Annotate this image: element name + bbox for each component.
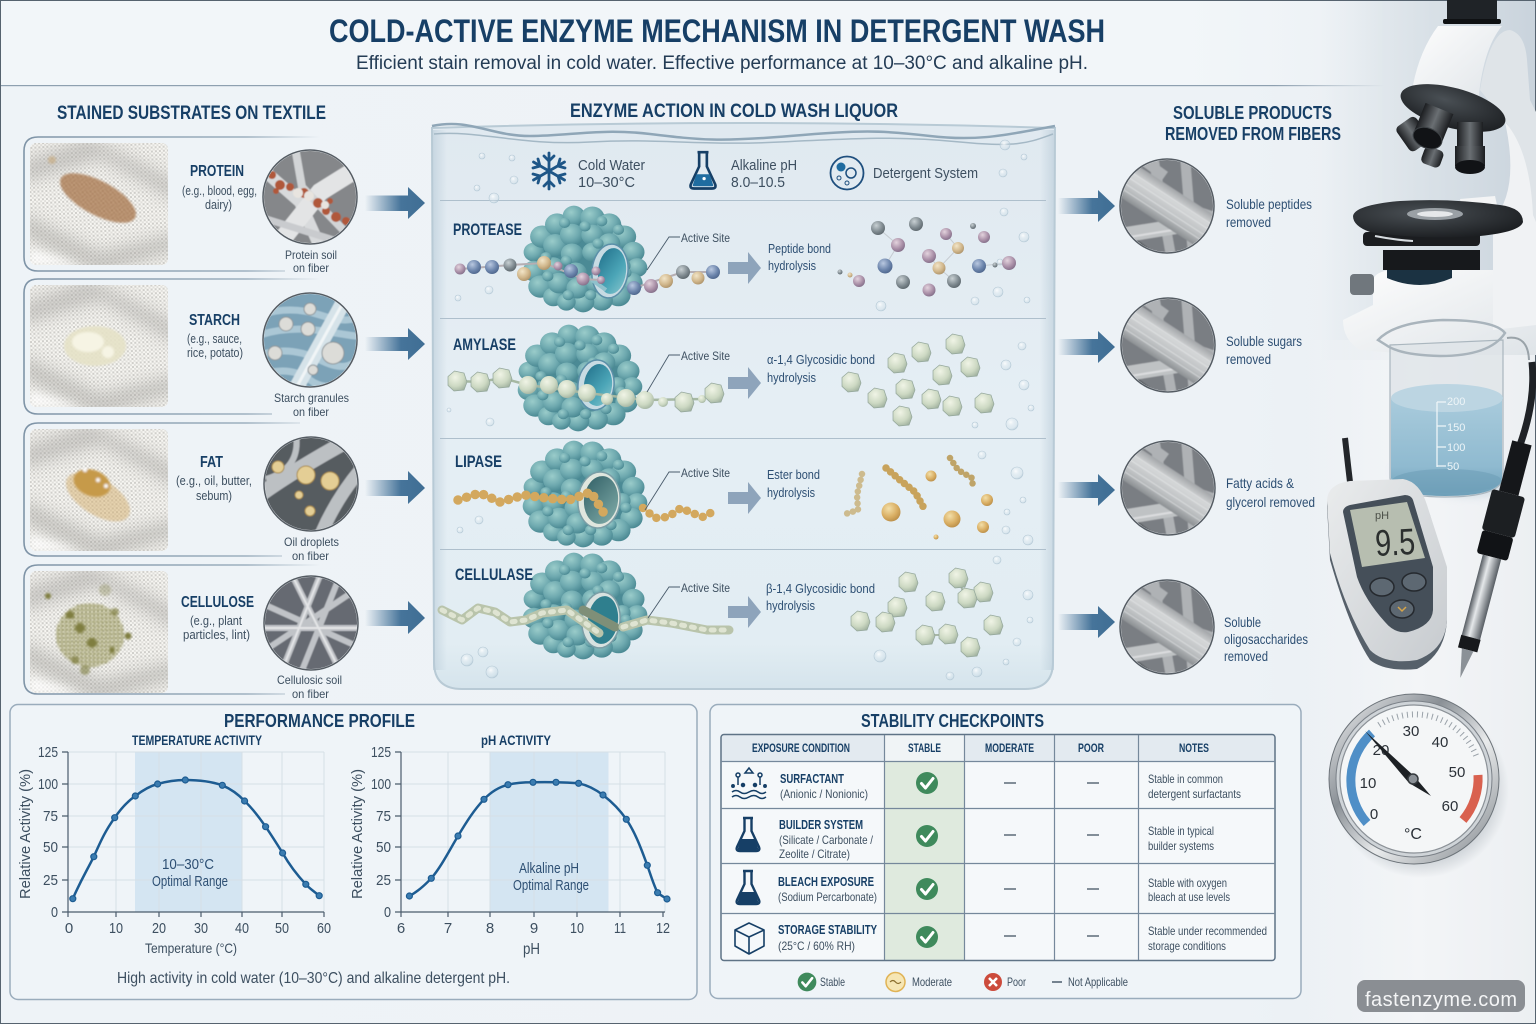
row: surfactant: detergent surfactants [1148, 787, 1241, 801]
row: cellulase [442, 553, 1003, 659]
table: stability: POOR [1078, 743, 1105, 755]
enzyme: lipase [523, 441, 647, 547]
row: builder system [737, 818, 1214, 861]
panel: cellulose substrate: on fiber [292, 687, 329, 701]
row: amylase: AMYLASE [453, 335, 516, 354]
bubbles [447, 140, 1034, 680]
chart: temperature activity: 50 [275, 920, 289, 937]
icon: flask [737, 818, 759, 851]
panel: performance profile: PERFORMANCE PROFILE [224, 711, 415, 731]
condition: cold water: Cold Water [578, 157, 645, 174]
arrow: starch to beaker [365, 328, 425, 360]
arrow: cellulase products [1058, 606, 1115, 638]
chart: pH activity: 125 [371, 744, 391, 761]
callout: active site: Active Site [681, 231, 730, 245]
panel: stability checkpoints [710, 704, 1301, 998]
condition: cold water [533, 153, 645, 191]
head [1413, 26, 1502, 105]
result: soluble oligosaccharides [1098, 574, 1308, 680]
chart: temperature activity: TEMPERATURE ACTIVITY [132, 733, 262, 748]
panel: fat substrate [20, 423, 361, 563]
icon: detergent bubbles [830, 156, 864, 190]
pH meter: pH [1375, 510, 1389, 522]
icon: protein soil on fiber [260, 147, 360, 247]
panel: protein substrate: (e.g., blood, egg, [182, 184, 257, 198]
chart: temperature activity: 125 [38, 744, 58, 761]
chart: pH activity: 0 [384, 904, 391, 921]
panel: cellulose substrate: CELLULOSE [181, 594, 254, 611]
panel: wash liquor beaker [432, 123, 1055, 689]
label: alpha glycosidic bond: hydrolysis [767, 370, 816, 385]
panel: protein substrate: dairy) [205, 198, 232, 212]
label: ester bond [767, 467, 820, 500]
products: oligosaccharides [851, 568, 1003, 657]
arrow: protein to beaker [365, 187, 425, 219]
condition: detergent system [830, 156, 978, 190]
callout: active site: Active Site [681, 349, 730, 363]
chart: pH activity: Relative Activity (%) [350, 769, 366, 899]
substrate chain: protein [454, 256, 720, 295]
row: builder system: (Silicate / Carbonate / [779, 833, 874, 847]
condition: cold water: 10–30°C [578, 174, 635, 191]
result: soluble sugars: removed [1226, 351, 1271, 367]
result: soluble peptides: Soluble peptides [1226, 196, 1312, 212]
glass beaker: 150 [1447, 422, 1465, 434]
chart: temperature activity: 75 [43, 808, 58, 825]
chart: temperature activity: 30 [194, 920, 208, 937]
subtitle: Efficient stain removal in cold water. Effective performance at 10–30°C and alkaline pH. [356, 53, 1088, 74]
legend [798, 972, 1128, 992]
icon: surfactant [732, 768, 766, 798]
chart: pH activity: 9 [530, 920, 538, 937]
arrow: hydrolysis [728, 596, 761, 628]
substrate chain: cellulose [442, 608, 729, 633]
nosepiece [1396, 75, 1510, 141]
condition: alkaline pH [690, 152, 797, 191]
row: builder system: builder systems [1148, 839, 1214, 853]
panel: cellulose substrate: (e.g., plant [190, 614, 242, 628]
label: ester bond: hydrolysis [767, 485, 815, 500]
row: storage stability: storage conditions [1148, 939, 1226, 953]
row: storage stability: Stable under recommended [1148, 924, 1267, 938]
arrow: lipase products [1058, 474, 1115, 506]
row: builder system: BUILDER SYSTEM [779, 818, 863, 832]
label: beta glycosidic bond: hydrolysis [766, 598, 815, 613]
row: cellulase: CELLULASE [455, 565, 533, 584]
watermark: fastenzyme.com [1365, 989, 1517, 1011]
table: stability: STABLE [908, 743, 941, 755]
enzyme: cellulase [523, 553, 647, 659]
row: storage stability: (25°C / 60% RH) [778, 939, 855, 953]
row: lipase [455, 441, 993, 547]
probe [1444, 338, 1536, 682]
thermometer dial: 10 [1360, 775, 1376, 792]
chart: pH activity: 75 [376, 808, 391, 825]
legend: Moderate [912, 975, 952, 989]
chart: pH activity: 6 [397, 920, 405, 937]
chart: pH activity: 11 [614, 920, 626, 937]
pH meter: 9.5 [1374, 521, 1416, 564]
icon: snowflake [533, 153, 565, 189]
chart: pH activity: 12 [656, 920, 670, 937]
objectives [1394, 103, 1485, 174]
heading: soluble products: REMOVED FROM FIBERS [1165, 124, 1341, 144]
label: alpha glycosidic bond [767, 352, 875, 385]
chart: temperature activity: 100 [38, 776, 58, 793]
row: surfactant: (Anionic / Nonionic) [780, 787, 868, 801]
title: COLD-ACTIVE ENZYME MECHANISM IN DETERGENT WASH [329, 13, 1105, 49]
row: protease [453, 206, 1016, 312]
panel: fat substrate: Oil droplets [284, 535, 339, 549]
label: alpha glycosidic bond: α-1,4 Glycosidic bond [767, 352, 875, 367]
chart: temperature activity: 40 [235, 920, 249, 937]
pH meter [1327, 438, 1447, 670]
result: soluble peptides: removed [1226, 214, 1271, 230]
glass beaker: 50 [1447, 461, 1459, 473]
substrate chain: fat [458, 492, 716, 518]
chart: temperature activity [18, 733, 331, 956]
row: protease: PROTEASE [453, 220, 522, 239]
label: beta glycosidic bond [766, 581, 875, 613]
glass beaker: 200 [1447, 396, 1465, 408]
row: builder system: Zeolite / Citrate) [779, 847, 850, 861]
panel: starch substrate: on fiber [293, 405, 329, 419]
condition: alkaline pH: Alkaline pH [731, 157, 797, 174]
icon: flask [690, 152, 716, 188]
arrow: fat to beaker [365, 471, 425, 504]
products: peptides [838, 217, 1016, 296]
panel: stability checkpoints: STABILITY CHECKPOINTS [861, 711, 1044, 731]
result: fatty acids and glycerol: Fatty acids & [1226, 475, 1295, 491]
panel: fat substrate: (e.g., oil, butter, [176, 474, 252, 488]
icon: oil droplets on fiber [261, 434, 361, 534]
result: soluble sugars [1099, 292, 1302, 398]
panel: protein substrate: PROTEIN [190, 163, 244, 180]
arrow: hydrolysis [728, 482, 761, 514]
chart: pH activity: 10 [570, 920, 584, 937]
chart: pH activity: 8 [486, 920, 494, 937]
eyepiece [1447, 0, 1497, 20]
row: bleach exposure [737, 871, 1230, 904]
chart: pH activity: pH [523, 941, 540, 958]
callout: active site [648, 581, 730, 618]
products: sugars [842, 334, 994, 426]
arrow: hydrolysis [728, 367, 761, 399]
heading: soluble products: SOLUBLE PRODUCTS [1173, 103, 1332, 123]
panel: fat substrate: on fiber [292, 549, 329, 563]
panel: cellulose substrate: particles, lint) [183, 628, 250, 642]
glass beaker [1378, 320, 1520, 497]
heading: soluble products [1165, 103, 1341, 144]
condition: detergent system: Detergent System [873, 165, 978, 182]
microscope arm [1480, 30, 1536, 265]
thermometer dial: 40 [1432, 734, 1448, 751]
chart: temperature activity: 25 [43, 872, 58, 889]
watermark [1357, 980, 1525, 1012]
condition: alkaline pH: 8.0–10.5 [731, 174, 785, 191]
callout: active site [647, 231, 730, 270]
row: surfactant: Stable in common [1148, 772, 1223, 786]
row: amylase [448, 325, 994, 431]
enzyme: protease [523, 206, 647, 312]
table: stability [721, 734, 1275, 960]
row: builder system: Stable in typical [1148, 824, 1214, 838]
base [1343, 270, 1536, 355]
glass beaker: 100 [1447, 442, 1465, 454]
table: stability: EXPOSURE CONDITION [752, 743, 850, 755]
legend: Stable [820, 975, 845, 989]
caption: High activity in cold water (10–30°C) and alkaline detergent pH. [117, 970, 510, 987]
chart: temperature activity: 0 [51, 904, 58, 921]
label: peptide bond [768, 241, 831, 273]
chart: temperature activity: Temperature (°C) [145, 940, 237, 956]
table: stability: MODERATE [985, 743, 1034, 755]
legend: Not Applicable [1068, 975, 1128, 989]
row: bleach exposure: (Sodium Percarbonate) [778, 890, 877, 904]
products: fatty acids and glycerol [842, 458, 993, 540]
chart: temperature activity: 20 [152, 920, 166, 937]
thermometer dial: 30 [1403, 723, 1419, 740]
icon: cellulosic soil on fiber [261, 573, 361, 673]
chart: pH activity: 50 [376, 839, 391, 856]
microscope [1343, 0, 1536, 355]
row: bleach exposure: Stable with oxygen [1148, 876, 1227, 890]
chart: pH activity [350, 733, 670, 958]
heading: enzyme action: ENZYME ACTION IN COLD WASH LIQUOR [570, 101, 898, 122]
callout: active site: Active Site [681, 581, 730, 595]
chart: temperature activity: Optimal Range [152, 874, 228, 890]
chart: pH activity: 100 [371, 776, 391, 793]
result: soluble oligosaccharides: oligosaccharides [1224, 631, 1308, 647]
chart: temperature activity: 0 [65, 920, 73, 937]
thermometer dial: 20 [1373, 742, 1389, 759]
callout: active site [645, 466, 730, 510]
heading: stained substrates: STAINED SUBSTRATES ON TEXTILE [57, 103, 326, 124]
panel: protein substrate: on fiber [293, 261, 329, 275]
label: peptide bond: Peptide bond [768, 241, 831, 256]
panel: starch substrate: rice, potato) [187, 346, 243, 360]
thermometer dial [1329, 694, 1509, 878]
icon: box [735, 923, 764, 954]
substrate chain: starch [448, 368, 724, 412]
chart: temperature activity: Relative Activity (%) [18, 769, 34, 899]
result: soluble oligosaccharides: removed [1224, 648, 1268, 664]
row: bleach exposure: BLEACH EXPOSURE [778, 875, 874, 889]
thermometer dial: 50 [1449, 764, 1465, 781]
chart: temperature activity: 10 [109, 920, 123, 937]
arrow: protease products [1058, 190, 1115, 222]
arrow: amylase products [1058, 331, 1115, 363]
stage [1353, 200, 1523, 237]
label: peptide bond: hydrolysis [768, 258, 816, 273]
result: fatty acids and glycerol [1099, 435, 1315, 541]
panel: starch substrate: STARCH [189, 312, 240, 329]
panel: cellulose substrate [20, 565, 361, 701]
panel: performance profile [10, 704, 697, 1000]
callout: active site [647, 349, 730, 392]
panel: starch substrate [20, 279, 362, 419]
row: surfactant [732, 768, 1241, 801]
result: fatty acids and glycerol: glycerol removed [1226, 494, 1315, 510]
thermometer dial: 0 [1370, 806, 1378, 823]
thermometer dial: °C [1404, 826, 1422, 843]
result: soluble oligosaccharides: Soluble [1224, 614, 1261, 630]
result: soluble sugars: Soluble sugars [1226, 333, 1302, 349]
enzyme: amylase [518, 325, 642, 431]
label: beta glycosidic bond: β-1,4 Glycosidic bond [766, 581, 875, 596]
label: ester bond: Ester bond [767, 467, 820, 482]
panel: fat substrate: sebum) [196, 489, 232, 503]
callout: active site: Active Site [681, 466, 730, 480]
icon: flask [737, 871, 759, 904]
chart: pH activity: pH ACTIVITY [481, 733, 551, 748]
arrow: cellulose to beaker [365, 601, 425, 634]
arrow: hydrolysis [728, 252, 761, 284]
row: storage stability [735, 923, 1267, 954]
chart: temperature activity: 60 [317, 920, 331, 937]
panel: protein substrate: Protein soil [285, 248, 337, 262]
row: surfactant: SURFACTANT [780, 772, 844, 786]
thermometer dial: 60 [1442, 798, 1458, 815]
panel: cellulose substrate: Cellulosic soil [277, 673, 342, 687]
table: stability: NOTES [1179, 743, 1209, 755]
legend: Poor [1007, 975, 1026, 989]
row: lipase: LIPASE [455, 452, 502, 471]
panel: fat substrate: FAT [200, 454, 223, 471]
chart: temperature activity: 10–30°C [162, 857, 214, 873]
chart: temperature activity: 50 [43, 839, 58, 856]
result: soluble peptides [1098, 153, 1312, 259]
panel: starch substrate: (e.g., sauce, [187, 332, 242, 346]
row: bleach exposure: bleach at use levels [1148, 890, 1230, 904]
panel: starch substrate: Starch granules [274, 391, 349, 405]
chart: pH activity: Optimal Range [513, 878, 589, 894]
chart: pH activity: 7 [444, 920, 452, 937]
panel: protein substrate [20, 137, 360, 275]
row: storage stability: STORAGE STABILITY [778, 923, 878, 937]
chart: pH activity: 25 [376, 872, 391, 889]
icon: starch granules on fiber [260, 290, 362, 390]
chart: pH activity: Alkaline pH [519, 861, 579, 877]
